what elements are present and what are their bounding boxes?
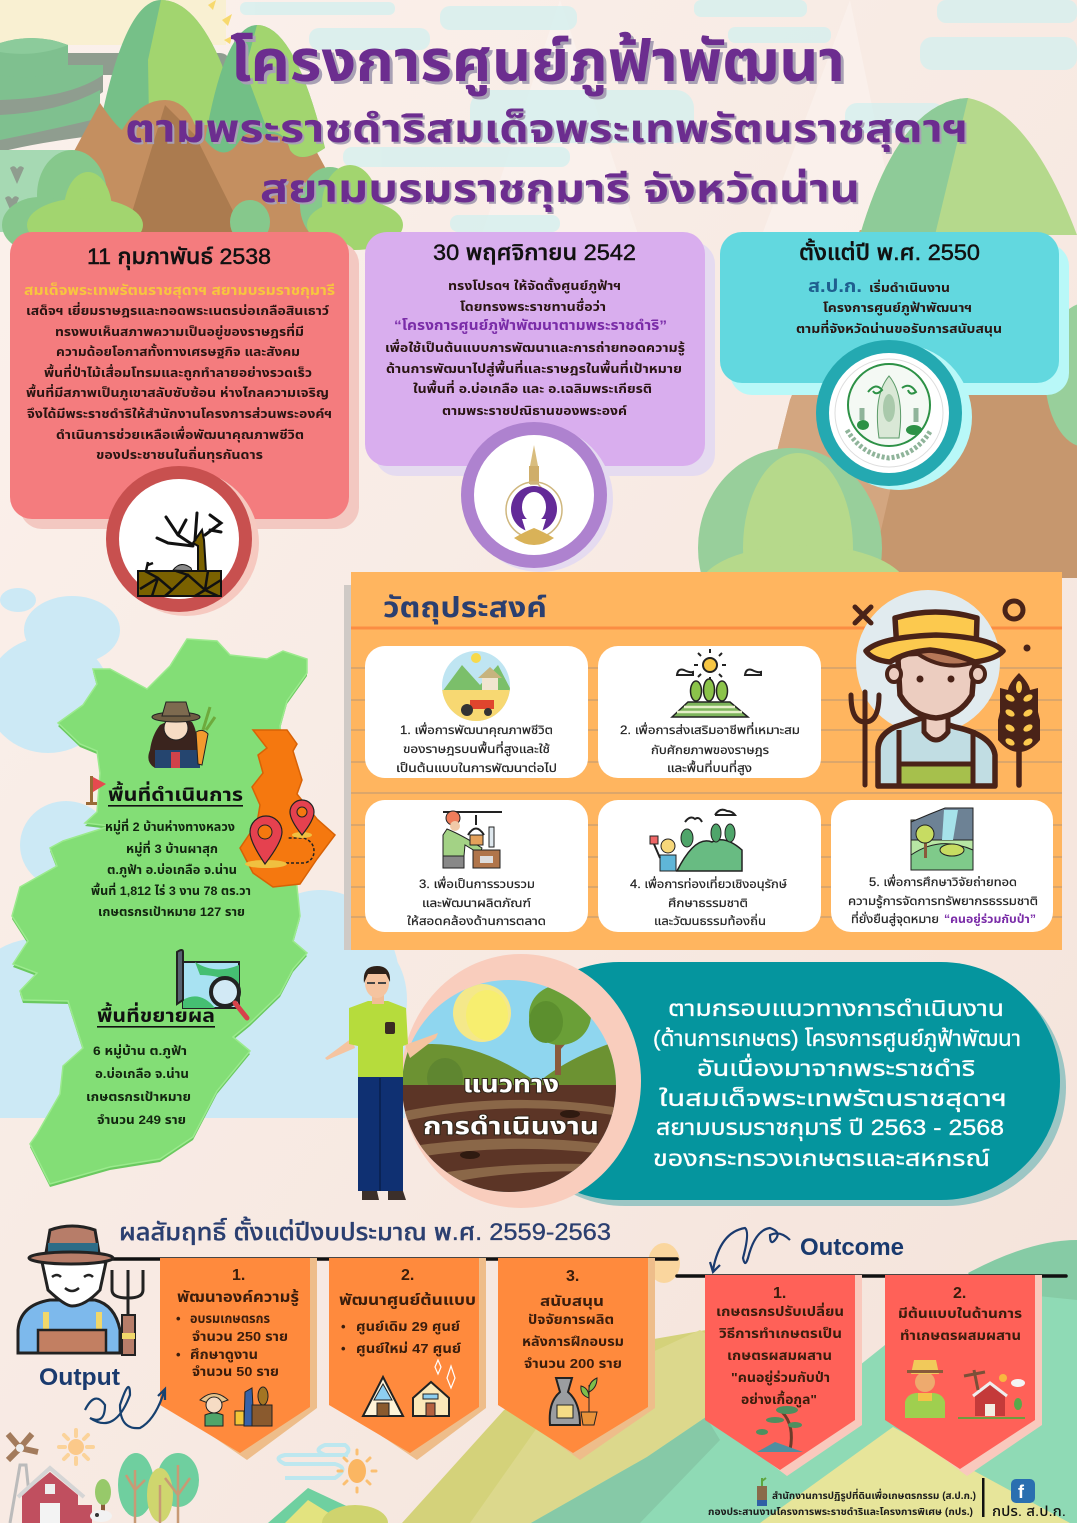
- panel: purple card 2542: ในพื้นที่ อ.บ่อเกลือ และ อ.เฉลิมพระเกียรติ: [413, 380, 652, 396]
- panel: purple card 2542: ด้านการพัฒนาไปสู่พื้นที่และราษฎรในพื้นที่เป้าหมาย: [386, 360, 682, 377]
- objective card 5: ความรู้การจัดการทรัพยากรธรรมชาติ: [848, 894, 1038, 908]
- icon: tree on book: [756, 1406, 803, 1452]
- title line 1 shadow: โครงการศูนย์ภูฟ้าพัฒนา: [233, 32, 848, 100]
- objective card 2: [598, 646, 821, 778]
- panel: outcome banner 1: 1.: [773, 1285, 786, 1302]
- panel: output banner 3: หลังการฝึกอบรม: [522, 1334, 624, 1349]
- panel: teal card 2550: โครงการศูนย์ภูฟ้าพัฒนาฯ: [823, 301, 972, 316]
- icon: farmer with fork and wheat: [851, 590, 1040, 786]
- yellow sun rays: [208, 0, 232, 44]
- objective card 2: กับศักยภาพของราษฎร: [651, 744, 769, 757]
- objectives heading: วัตถุประสงค์: [383, 592, 547, 624]
- panel: outcome banner 2: 2.: [953, 1285, 966, 1302]
- panel: outcome banner 1: วิธีการทำเกษตรเป็น: [719, 1326, 842, 1341]
- area details: หมู่ที่ 2 บ้านห่างทางหลวง: [105, 818, 235, 835]
- objective card 3: ให้สอดคล้องด้านการตลาด: [407, 914, 546, 928]
- expansion area details: จำนวน 249 ราย: [97, 1113, 186, 1127]
- trees: [118, 1453, 199, 1523]
- expansion area details: อ.บ่อเกลือ จ.น่าน: [95, 1067, 189, 1081]
- panel: red card 2538: ดำเนินการช่วยเหลือเพื่อพัฒนาคุณภาพชีวิต: [56, 426, 304, 442]
- sun: [59, 1430, 93, 1464]
- bottom right hills: [402, 1330, 900, 1523]
- objective card 1: เป็นต้นแบบในการพัฒนาต่อไป: [396, 761, 557, 775]
- objective card 5: ที่ยั่งยืนสู่จุดหมาย: [851, 911, 939, 926]
- panel: output banner 3: จำนวน 200 ราย: [524, 1356, 622, 1371]
- brown mountain top: [60, 100, 362, 235]
- panel: objectives: [344, 572, 1062, 950]
- title: ตามพระราชดำริสมเด็จพระเทพรัตนราชสุดาฯ: [127, 110, 970, 154]
- panel: output banner 1: ศึกษาดูงาน: [190, 1347, 258, 1363]
- panel: outcome banner 1: เกษตรกรปรับเปลี่ยน: [716, 1302, 844, 1319]
- clouds left: [0, 588, 407, 1118]
- panel: guidelines pill: สยามบรมราชกุมารี ปี 2563 - 2568: [656, 1115, 1004, 1141]
- bottom left farm scene: [8, 1430, 376, 1523]
- right green peak: [860, 98, 1077, 235]
- panel: guidelines pill: [400, 954, 1066, 1208]
- panel: guidelines pill: (ด้านการเกษตร) โครงการศูนย์ภูฟ้าพัฒนา: [653, 1026, 1021, 1052]
- label: outcome: Outcome: [800, 1234, 904, 1261]
- panel: outcome banner 2: มีต้นแบบในด้านการ: [898, 1306, 1022, 1321]
- label: output: Output: [39, 1364, 120, 1391]
- objective card 1: ของราษฎรบนพื้นที่สูงและใช้: [403, 741, 550, 756]
- icon: map and magnifier: [177, 950, 247, 1018]
- icon: output farmer: [18, 1226, 143, 1355]
- panel: teal card 2550: เริ่มดำเนินงาน: [869, 280, 950, 295]
- objective card 4: [598, 800, 821, 932]
- panel: red card 2538: ทรงพบเห็นสภาพความเป็นอยู่ของราษฎรที่มี: [55, 323, 304, 340]
- circle: field illustration: [400, 954, 641, 1208]
- panel: red card 2538: ความด้อยโอกาสทั้งทางเศรษฐกิจ และสังคม: [56, 343, 300, 359]
- title: [125, 29, 970, 214]
- objective card 1: [365, 646, 588, 778]
- panel: output banner 3: [498, 1258, 655, 1460]
- panel: output banner 1: จำนวน 250 ราย: [192, 1329, 288, 1344]
- green tall peak: [100, 0, 250, 180]
- panel: output banner 1: 1.: [232, 1267, 245, 1284]
- panel: red card 2538: 11 กุมภาพันธ์ 2538: [87, 244, 271, 270]
- expansion area details: เกษตรกรเป้าหมาย: [86, 1090, 191, 1104]
- objective card 1: 1. เพื่อการพัฒนาคุณภาพชีวิต: [400, 722, 553, 737]
- panel: output banner 2: ศูนย์เดิม 29 ศูนย์: [356, 1319, 460, 1335]
- panel: output banner 2: [329, 1258, 486, 1460]
- expansion area details: [86, 1044, 191, 1127]
- panel: output banner 1: จำนวน 50 ราย: [192, 1364, 279, 1379]
- breeze lines: [278, 1445, 348, 1478]
- icon: waterfall and forest: [911, 808, 973, 870]
- objective card 2: 2. เพื่อการส่งเสริมอาชีพที่เหมาะสม: [620, 722, 800, 737]
- icon: tourist and hills: [650, 810, 742, 871]
- icon: two houses: [363, 1360, 455, 1416]
- arrow: output squiggle: [85, 1387, 165, 1428]
- objective card 4: ศึกษาธรรมชาติ: [668, 897, 748, 910]
- title: สยามบรมราชกุมารี จังหวัดน่าน: [262, 170, 862, 214]
- panel: output banner 1: อบรมเกษตรกร: [190, 1311, 270, 1326]
- objective card 4: และวัฒนธรรมท้องถิ่น: [654, 914, 766, 928]
- area details: พื้นที่ 1,812 ไร่ 3 งาน 78 ตร.วา: [91, 882, 251, 898]
- area heading: พื้นที่ดำเนินการ: [108, 781, 243, 806]
- panel: purple card 2542: 30 พฤศจิกายน 2542: [433, 240, 636, 265]
- panel: outcome banner 1: [705, 1275, 862, 1476]
- objective card 4: 4. เพื่อการท่องเที่ยวเชิงอนุรักษ์: [630, 876, 787, 891]
- panel: purple card 2542: ตามพระราชปณิธานของพระองค์: [442, 404, 627, 418]
- panel: output banner 1: •: [176, 1347, 181, 1362]
- panel: output banner 2: 2.: [401, 1267, 414, 1284]
- icon: farmer and barn: [905, 1360, 1025, 1418]
- panel: output banner 2: ศูนย์ใหม่ 47 ศูนย์: [356, 1341, 461, 1357]
- icon: royal emblem: [461, 422, 613, 572]
- rope line outcome: [677, 1274, 1066, 1278]
- green second peak: [205, 25, 325, 157]
- panel: output banner 3: สนับสนุน: [540, 1293, 604, 1310]
- footer: agency credits: กองประสานงานโครงการพระราชดำริและโครงการพิเศษ (กปร.): [708, 1506, 973, 1518]
- objective card 5: [831, 800, 1053, 932]
- windmill: [8, 1434, 38, 1523]
- panel: guidelines pill: ของกระทรวงเกษตรและสหกรณ์: [653, 1146, 990, 1171]
- title: สยามบรมราชกุมารี จังหวัดน่าน: [260, 168, 860, 212]
- panel: red card 2538: พื้นที่มีสภาพเป็นภูเขาสลับซับซ้อน ห่างไกลความเจริญ: [26, 384, 329, 401]
- rope line output: [110, 1257, 677, 1261]
- panel: guidelines pill: ในสมเด็จพระเทพรัตนราชสุดาฯ: [659, 1086, 1007, 1112]
- icon: ALRO seal: [816, 340, 972, 490]
- icon: farm with tractor: [440, 650, 512, 722]
- circle: field illustration: การดำเนินงาน: [423, 1113, 599, 1140]
- area details: เกษตรกรเป้าหมาย 127 ราย: [98, 905, 245, 919]
- panel: outcome banner 1: "คนอยู่ร่วมกับป่า: [731, 1370, 830, 1386]
- barn: [18, 1468, 92, 1523]
- icon: seed bag and plant: [550, 1378, 597, 1425]
- expansion area details: 6 หมู่บ้าน ต.ภูฟ้า: [93, 1044, 187, 1059]
- objective card 5: 5. เพื่อการศึกษาวิจัยถ่ายทอด: [869, 874, 1017, 889]
- panel: outcome banner 1: เกษตรผสมผสาน: [727, 1348, 832, 1363]
- panel: purple card 2542: โดยทรงพระราชทานชื่อว่า: [460, 298, 606, 314]
- cow: [90, 1510, 112, 1522]
- panel: red card 2538: พื้นที่ป่าไม้เสื่อมโทรมและถูกทำลายอย่างรวดเร็ว: [44, 364, 312, 381]
- sun right: [338, 1450, 376, 1492]
- bottom hill: [268, 1488, 372, 1523]
- arrow: outcome squiggle: [710, 1228, 790, 1272]
- panel: output banner 2: •: [341, 1341, 346, 1356]
- icon: woman farmer with carrot: [148, 702, 215, 768]
- icon: facebook: f: [1018, 1482, 1025, 1502]
- icon: mascot: [757, 1478, 767, 1506]
- objective card 3: และพัฒนาผลิตภัณฑ์: [422, 897, 531, 910]
- title: ตามพระราชดำริสมเด็จพระเทพรัตนราชสุดาฯ: [125, 108, 968, 152]
- panel: purple card 2542: ทรงโปรดฯ ให้จัดตั้งศูนย์ภูฟ้าฯ: [448, 277, 621, 294]
- sun blob decoration: [648, 1243, 680, 1283]
- panel: output banner 3: 3.: [566, 1268, 579, 1285]
- icon: farmer and merchant: [200, 1387, 272, 1426]
- map highlight: Bo Kluea district: [240, 730, 335, 887]
- panel: red card 2538: จึงได้มีพระราชดำริให้สำนักงานโครงการส่วนพระองค์ฯ: [27, 407, 332, 421]
- stacked hill left: [40, 53, 230, 75]
- panel: red card 2538: สมเด็จพระเทพรัตนราชสุดาฯ สยามบรมราชกุมารี: [24, 282, 335, 299]
- panel: outcome banner 2: ทำเกษตรผสมผสาน: [900, 1328, 1021, 1343]
- icon: facebook: [1011, 1479, 1035, 1503]
- panel: teal card 2550: [720, 232, 1069, 490]
- figure: presenter man: [325, 966, 438, 1200]
- icon: map pins: [245, 800, 314, 868]
- panel: red card 2538: ของประชาชนในถิ่นทุรกันดาร: [96, 447, 264, 462]
- panel: teal card 2550: ตามที่จังหวัดน่านขอรับการสนับสนุน: [796, 320, 1002, 336]
- objective card 3: [365, 800, 588, 932]
- expansion area heading: พื้นที่ขยายผล: [97, 1002, 215, 1027]
- panel: teal card 2550: ตั้งแต่ปี พ.ศ. 2550: [799, 238, 980, 265]
- map of Nan province: [12, 639, 335, 1187]
- area details: หมู่ที่ 3 บ้านผาสุก: [126, 840, 218, 857]
- panel: purple card 2542: “โครงการศูนย์ภูฟ้าพัฒนาตามพระราชดำริ”: [394, 317, 667, 335]
- panel: red card 2538: เสด็จฯ เยี่ยมราษฎรและทอดพระเนตรบ่อเกลือสินเธาว์: [26, 302, 329, 318]
- heading: results: ผลสัมฤทธิ์ ตั้งแต่ปีงบประมาณ พ.ศ. 2559-2563: [119, 1216, 611, 1246]
- panel: purple card 2542: [365, 232, 715, 572]
- objective card 5: “คนอยู่ร่วมกับป่า”: [944, 912, 1036, 927]
- bushes right: [1045, 303, 1077, 447]
- panel: output banner 1: •: [176, 1311, 181, 1326]
- panel: purple card 2542: เพื่อใช้เป็นต้นแบบการพัฒนาและการถ่ายทอดความรู้: [385, 339, 686, 356]
- panel: outcome banner 1: อย่างเกื้อกูล": [741, 1390, 817, 1408]
- panel: guidelines pill: ตามกรอบแนวทางการดำเนินงาน: [668, 996, 1004, 1021]
- panel: output banner 2: •: [341, 1319, 346, 1334]
- panel: guidelines pill: อันเนื่องมาจากพระราชดำริ: [697, 1053, 975, 1081]
- objective card 2: และพื้นที่บนที่สูง: [667, 760, 752, 775]
- objective card 3: 3. เพื่อเป็นการรวบรวม: [419, 876, 535, 891]
- footer: agency credits: [708, 1478, 1066, 1519]
- footer: agency credits: สำนักงานการปฏิรูปที่ดินเพื่อเกษตรกรรม (ส.ป.ก.): [772, 1488, 976, 1502]
- circle label: แนวทาง: [463, 1071, 559, 1098]
- title: โครงการศูนย์ภูฟ้าพัฒนา: [230, 29, 845, 97]
- bushes: [2, 150, 360, 253]
- panel: output banner 1: [160, 1258, 317, 1460]
- panel: teal card 2550: ส.ป.ก.: [808, 276, 862, 296]
- panel: outcome banner 2: [885, 1275, 1042, 1476]
- panel: red card 2538: [10, 232, 359, 616]
- panel: output banner 1: พัฒนาองค์ความรู้: [177, 1288, 299, 1307]
- icon: worker packing products: [443, 811, 502, 868]
- icon: red flag: [86, 776, 106, 805]
- panel: output banner 2: พัฒนาศูนย์ต้นแบบ: [339, 1291, 476, 1310]
- right brown mountain: [745, 230, 1077, 578]
- area details: ต.ภูฟ้า อ.บ่อเกลือ จ.น่าน: [107, 863, 237, 878]
- panel: output banner 3: ปัจจัยการผลิต: [528, 1312, 614, 1327]
- icon: dry tree and cracked ground: [106, 466, 259, 616]
- icon: sun and terraced crops: [672, 649, 761, 717]
- area details: [91, 818, 251, 919]
- small tree: [95, 1479, 111, 1517]
- footer: agency credits: กปร. ส.ป.ก.: [992, 1503, 1066, 1519]
